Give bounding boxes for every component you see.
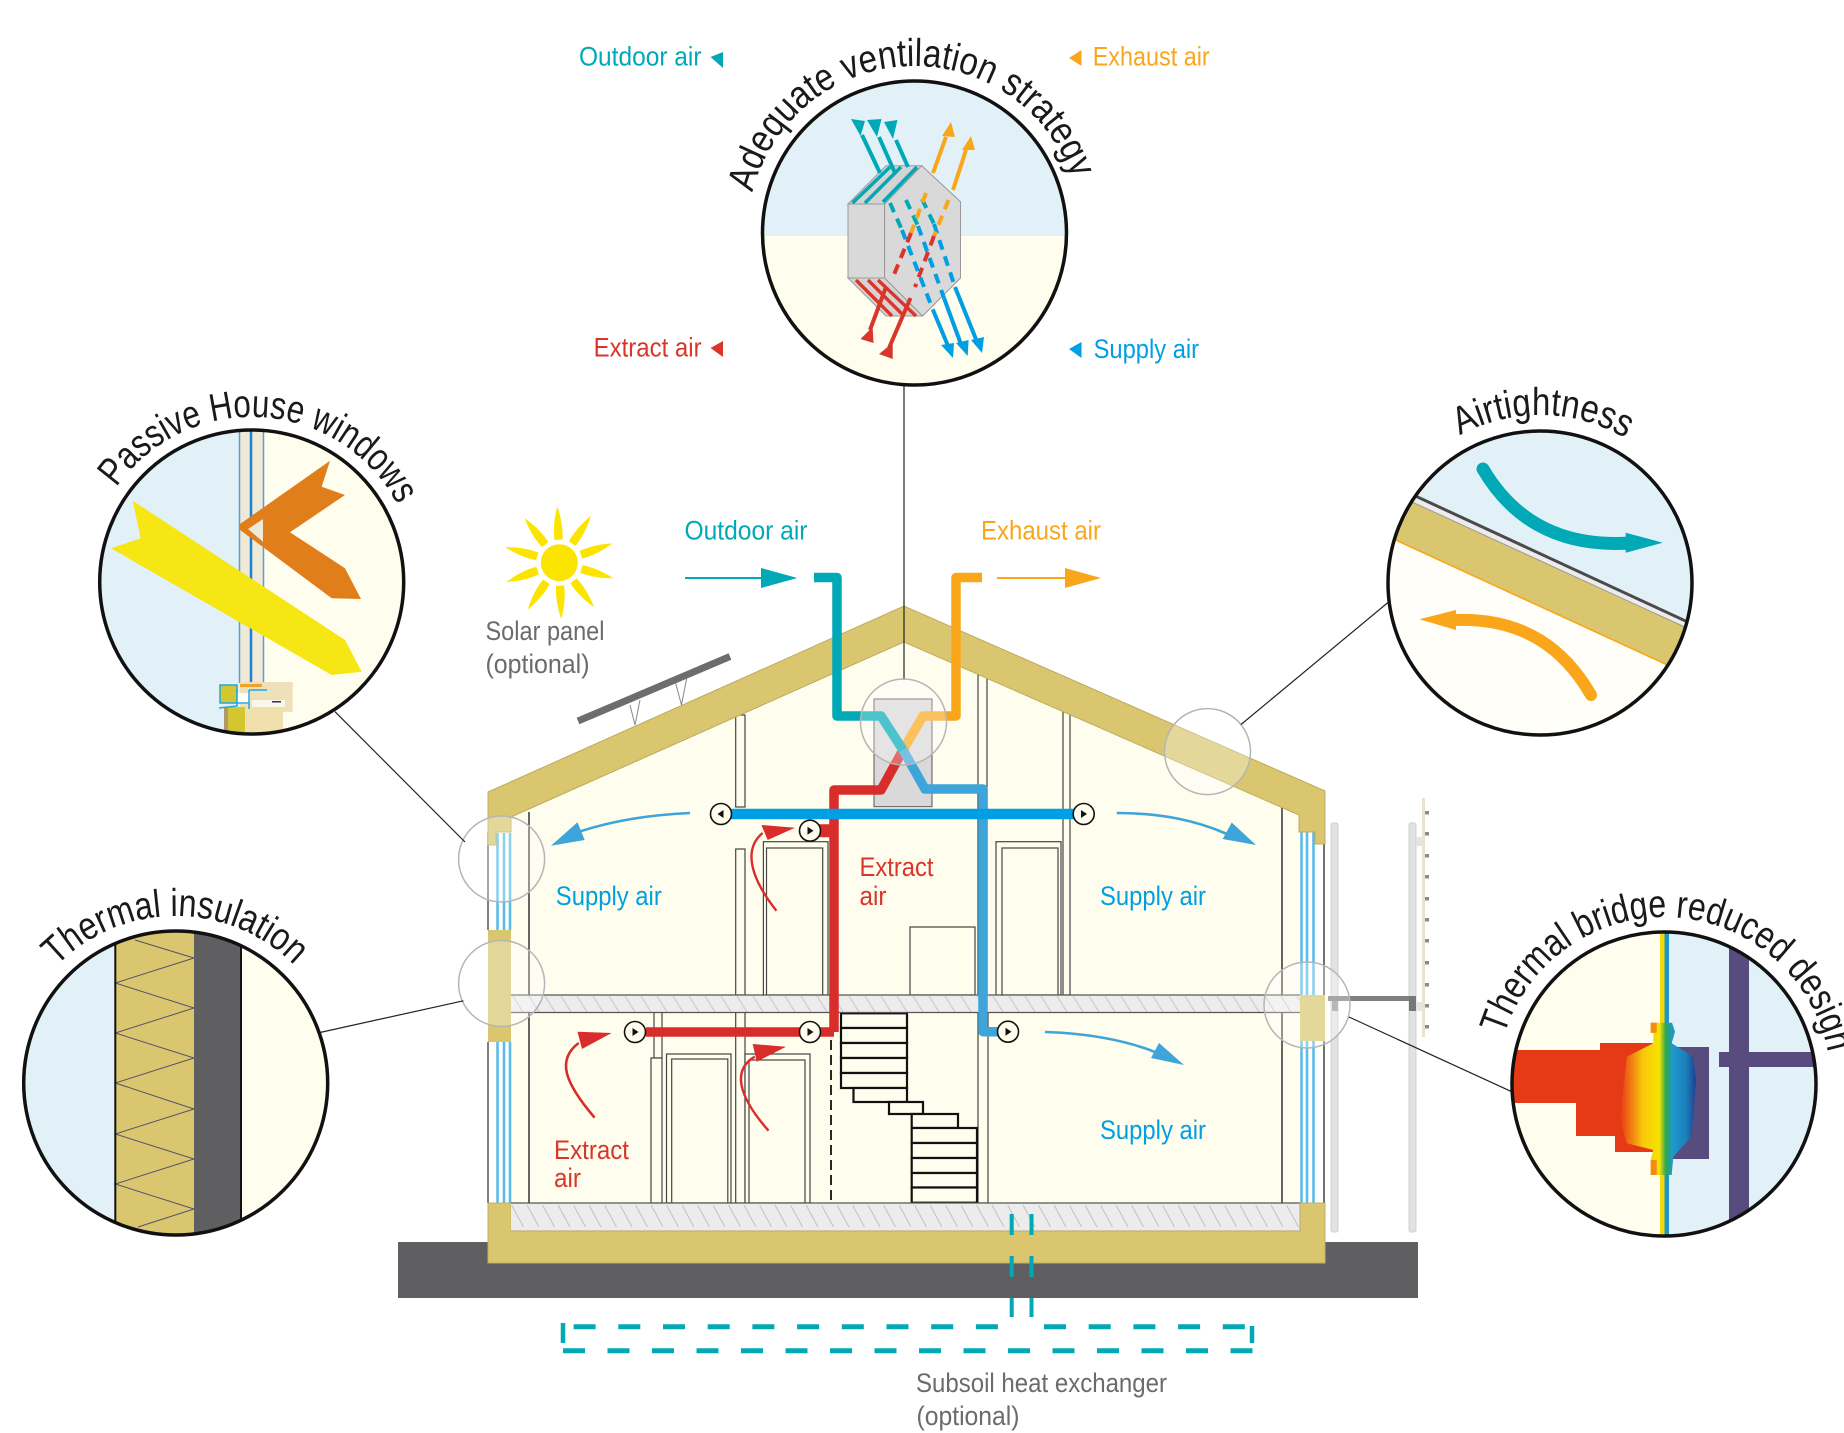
ducts: [646, 578, 1075, 1032]
legend: exhaust air: Exhaust air: [1093, 42, 1210, 72]
ground: [398, 1242, 1418, 1298]
legend: supply air: Supply air: [1094, 334, 1199, 364]
wall strip: [1660, 925, 1669, 1245]
connector: ventilation strategy: [903, 386, 905, 680]
thermal gradient: [1620, 1023, 1696, 1175]
subsoil heat exchanger: [563, 1214, 1253, 1351]
label: subsoil heat exchanger: Subsoil heat exchanger: [916, 1368, 1167, 1398]
fans: [624, 804, 1094, 1042]
right window lower: [1300, 1041, 1324, 1203]
panel: airtightness: [1386, 386, 1694, 737]
arrow: outdoor air: [685, 568, 797, 588]
staircase: [841, 1013, 977, 1203]
heading: Adequate ventilation strategy: [730, 38, 1092, 192]
arrow: outside air: [1483, 469, 1663, 553]
heading: Passive House windows: [96, 392, 413, 502]
right window upper: [1300, 832, 1324, 995]
arrow: inside air: [1419, 610, 1591, 695]
triple glazing: [240, 425, 264, 683]
label: supply air right upper: Supply air: [1100, 881, 1206, 911]
ventilation unit: [874, 699, 932, 807]
ground slab: [511, 1203, 1300, 1231]
icon: sun: [504, 506, 615, 619]
label: extract air lower: Extract: [554, 1135, 629, 1165]
arrows: room supply air: [551, 813, 1256, 1065]
label: solar panel: Solar panel: [486, 616, 604, 646]
label: outdoor air: Outdoor air: [684, 516, 808, 546]
supply air arrows: [933, 287, 984, 358]
foundation insulation: [488, 1203, 1325, 1263]
outgoing outdoor air arrows: [851, 119, 908, 173]
intermediate floor slab: [511, 995, 1300, 1012]
label: supply air left: Supply air: [556, 881, 662, 911]
exhaust air arrows: [933, 122, 975, 190]
duct: extract stub: [812, 824, 830, 837]
house cross-section: [488, 606, 1429, 1263]
panel: passive house windows: [96, 392, 413, 736]
house labels: [486, 516, 1206, 1431]
roof: [488, 606, 1325, 845]
inner wall lines: [529, 807, 1282, 1203]
label: subsoil heat exchanger: [916, 1368, 1167, 1431]
masonry layer: [194, 925, 241, 1240]
label: extract air upper: air: [860, 881, 886, 911]
duct: supply horizontal: [731, 809, 1075, 819]
arrow: solar radiation: [111, 501, 362, 675]
panel: thermal bridge reduced design: [1479, 893, 1844, 1238]
arrows: room extract air: [566, 825, 795, 1131]
balcony structure: [1673, 948, 1814, 1220]
duct: outdoor air: [814, 578, 903, 750]
dashed stair line: [830, 1040, 832, 1203]
upper floor partitions and doors: [736, 675, 1070, 995]
window frame detail: [219, 682, 293, 732]
label: supply air right lower: Supply air: [1100, 1115, 1206, 1145]
duct: supply vertical: [903, 750, 1008, 1032]
solar panel: [578, 656, 730, 725]
detail circles on house: [459, 679, 1350, 1048]
heading: Thermal insulation: [39, 888, 305, 964]
panel: thermal insulation: [22, 888, 330, 1237]
legend: outdoor air: Outdoor air: [579, 42, 702, 72]
label: extract air lower: [554, 1135, 629, 1193]
insulation layer: [115, 925, 194, 1240]
heading: Airtightness: [1456, 386, 1632, 436]
left window upper: [488, 832, 511, 930]
label: extract air upper: Extract: [860, 852, 934, 882]
extract air arrows: [860, 287, 910, 359]
label: extract air upper: [860, 852, 934, 911]
left wall insulation band: [488, 930, 511, 1042]
dashed flows through exchanger: [890, 193, 955, 310]
left window lower: [488, 1042, 511, 1203]
label: subsoil heat exchanger: (optional): [916, 1401, 1020, 1431]
duct: extract air: [646, 750, 903, 1032]
connector lines: [320, 600, 1512, 1092]
panel: adequate ventilation strategy: [730, 38, 1092, 387]
duct: exhaust air: [903, 578, 982, 750]
heat exchanger diagram: [848, 119, 984, 359]
warm concrete slab: [1505, 1043, 1653, 1152]
interior: [511, 642, 1299, 1203]
label: solar panel optional: (optional): [486, 649, 590, 679]
orange edges of thermal gradient: [1651, 1023, 1657, 1175]
arrow: exhaust air: [997, 568, 1101, 588]
lower floor partitions and doors: [651, 1012, 988, 1203]
balcony structure: [1328, 798, 1429, 1232]
label: exhaust air: Exhaust air: [981, 516, 1101, 546]
arrow: heat retained: [240, 461, 361, 599]
right wall insulation band: [1300, 995, 1325, 1041]
roof build-up: [1396, 496, 1686, 666]
label: extract air lower: air: [554, 1163, 581, 1193]
legend: extract air: Extract air: [594, 333, 702, 363]
